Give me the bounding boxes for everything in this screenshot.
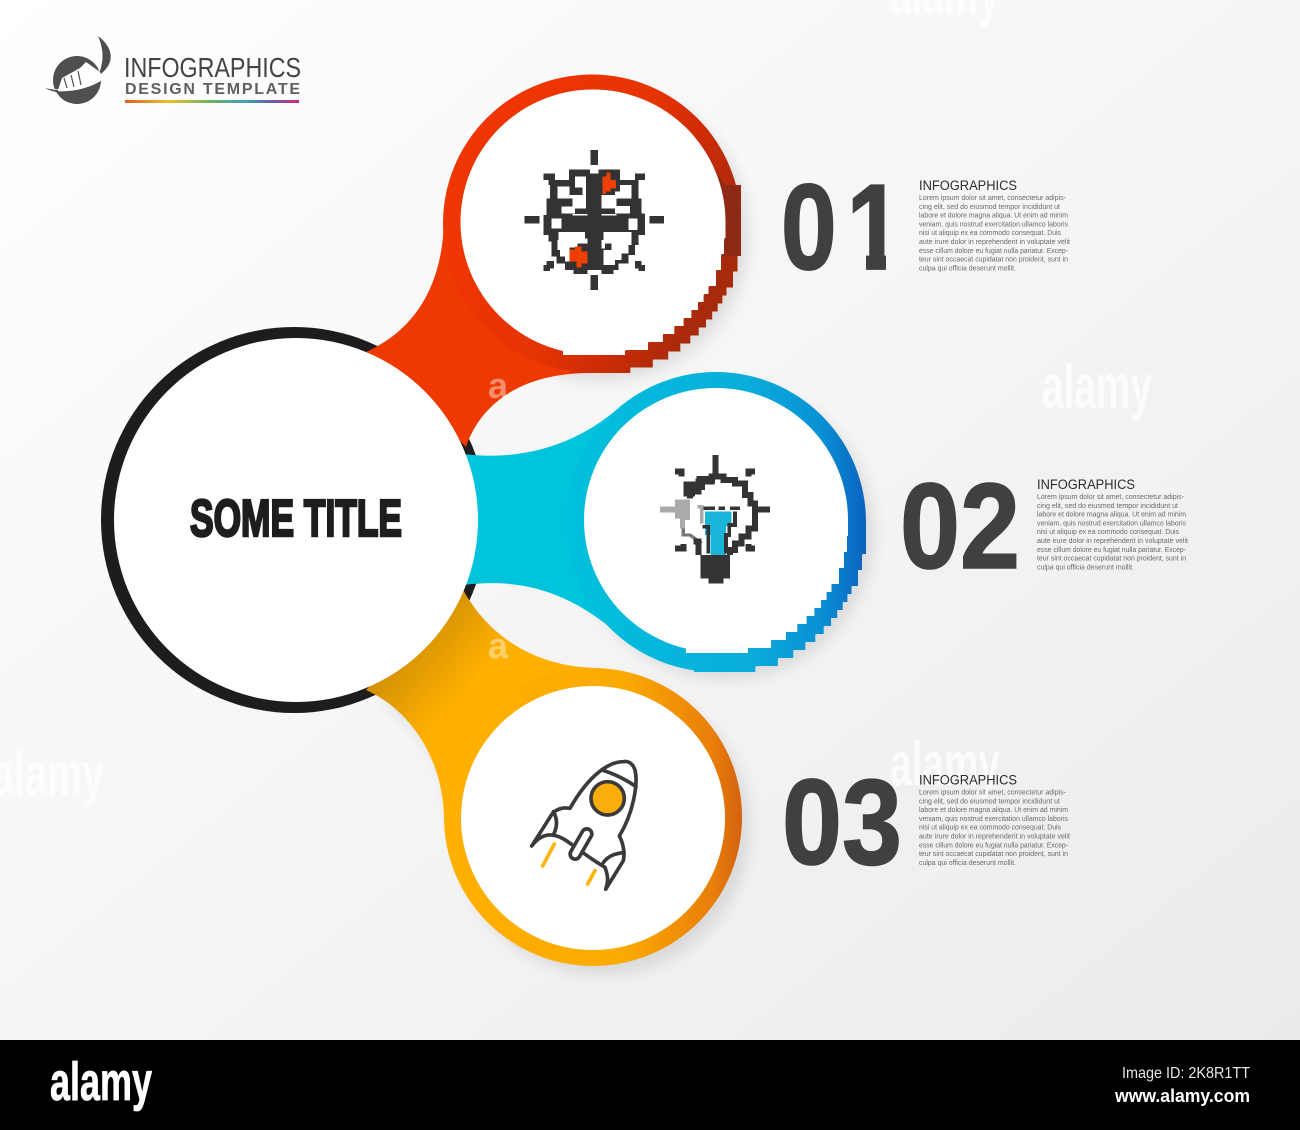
circle 1 — [460, 90, 726, 355]
body 01 — [919, 193, 1071, 272]
body 01: Lorem ipsum dolor sit amet, consectetur adipis- — [919, 193, 1066, 202]
bulb flame — [705, 512, 732, 555]
connector: yellow — [366, 588, 640, 900]
body 02: aute irure dolor in reprehenderit in voluptate velit — [1037, 536, 1189, 545]
body 02: nisi ut aliquip ex ea commodo consequat. Duis — [1037, 527, 1179, 536]
body 02: veniam, quis nostrud exercitation ullamco laboris — [1037, 518, 1186, 527]
body 01: aute irure dolor in reprehenderit in voluptate velit — [919, 237, 1071, 246]
icon: light bulb — [660, 455, 770, 583]
watermark letters on connectors: a — [488, 365, 509, 406]
ring 2: blue — [566, 372, 866, 672]
body 02: culpa qui officia deserunt mollit. — [1037, 562, 1134, 571]
heading 02: INFOGRAPHICS — [1037, 477, 1135, 492]
central black ring — [101, 327, 487, 713]
icon: rocket — [532, 761, 636, 889]
footer bar — [0, 1040, 1300, 1130]
ring 3: orange — [444, 668, 742, 966]
text block 02 — [1037, 477, 1189, 571]
body 02: teur sint occaecat cupidatat non proident, sunt in — [1037, 554, 1186, 563]
icon: brain — [524, 150, 664, 290]
heading 03: INFOGRAPHICS — [919, 772, 1017, 788]
footer image id: Image ID: 2K8R1TT — [1122, 1065, 1250, 1082]
body 01: culpa qui officia deserunt mollit. — [919, 263, 1016, 272]
body 02: esse cillum dolore eu fugiat nulla pariatur. Excep- — [1037, 545, 1186, 554]
bulb gray flare — [660, 500, 675, 518]
number 02: 02 — [900, 458, 1020, 594]
central title: SOME TITLE — [190, 490, 402, 548]
body 02 — [1037, 492, 1189, 571]
logo icon — [45, 36, 111, 104]
body 02: labore et dolore magna aliqua. Ut enim ad minim — [1037, 510, 1186, 519]
body 01: esse cillum dolore eu fugiat nulla pariatur. Excep- — [919, 246, 1068, 255]
bulb base — [701, 555, 730, 583]
logo wordmark: INFOGRAPHICS — [124, 52, 301, 83]
shadows behind rings — [380, 87, 873, 974]
watermarks — [0, 0, 1152, 809]
connector: cyan — [464, 400, 700, 640]
body 03: cing elit, sed do eiusmod tempor incididunt ut — [919, 796, 1061, 805]
circle 3 — [461, 686, 725, 950]
watermark letters on connectors: a — [488, 625, 509, 666]
footer logo: alamy — [50, 1052, 152, 1112]
body 01: teur sint occaecat cupidatat non proident, sunt in — [919, 255, 1068, 264]
watermark letters on connectors — [488, 365, 509, 666]
logo — [45, 36, 301, 104]
logo rainbow bar — [125, 100, 299, 103]
watermarks: alamy — [890, 730, 1000, 799]
body 03: esse cillum dolore eu fugiat nulla pariatur. Excep- — [919, 840, 1068, 849]
bulb glass — [690, 477, 755, 555]
body 03 — [919, 788, 1071, 867]
brain silhouette — [543, 169, 645, 274]
circle: central — [114, 338, 478, 702]
heading 01: INFOGRAPHICS — [919, 178, 1017, 193]
logo tagline: DESIGN TEMPLATE — [125, 81, 300, 98]
body 03: teur sint occaecat cupidatat non proident, sunt in — [919, 849, 1068, 858]
body 01: cing elit, sed do eiusmod tempor incididunt ut — [919, 202, 1061, 211]
connector: red — [366, 150, 640, 447]
number 03: 03 — [782, 754, 902, 890]
body 03: aute irure dolor in reprehenderit in voluptate velit — [919, 832, 1071, 840]
body 01: veniam, quis nostrud exercitation ullamco laboris — [919, 219, 1068, 228]
body 03: Lorem ipsum dolor sit amet, consectetur adipis- — [919, 788, 1066, 796]
ring 1: red — [443, 74, 741, 373]
circle 2 — [584, 388, 848, 653]
brain lobes — [552, 177, 637, 265]
body 02: cing elit, sed do eiusmod tempor incididunt ut — [1037, 501, 1179, 510]
bulb rays — [675, 455, 770, 548]
watermarks: alamy — [1042, 353, 1152, 422]
text block 03 — [919, 772, 1071, 867]
body 03: nisi ut aliquip ex ea commodo consequat. Duis — [919, 823, 1061, 832]
body 03: culpa qui officia deserunt mollit. — [919, 858, 1016, 867]
body 02: Lorem ipsum dolor sit amet, consectetur adipis- — [1037, 492, 1184, 501]
body 01: labore et dolore magna aliqua. Ut enim ad minim — [919, 211, 1068, 220]
body 01: nisi ut aliquip ex ea commodo consequat. Duis — [919, 228, 1061, 237]
body 03: veniam, quis nostrud exercitation ullamco laboris — [919, 814, 1068, 823]
number 01: 01 — [781, 159, 902, 295]
brain rays — [524, 150, 664, 290]
body 03: labore et dolore magna aliqua. Ut enim ad minim — [919, 805, 1068, 814]
footer url: www.alamy.com — [1114, 1086, 1250, 1106]
text block 01 — [919, 178, 1071, 272]
brain highlights — [569, 173, 616, 267]
